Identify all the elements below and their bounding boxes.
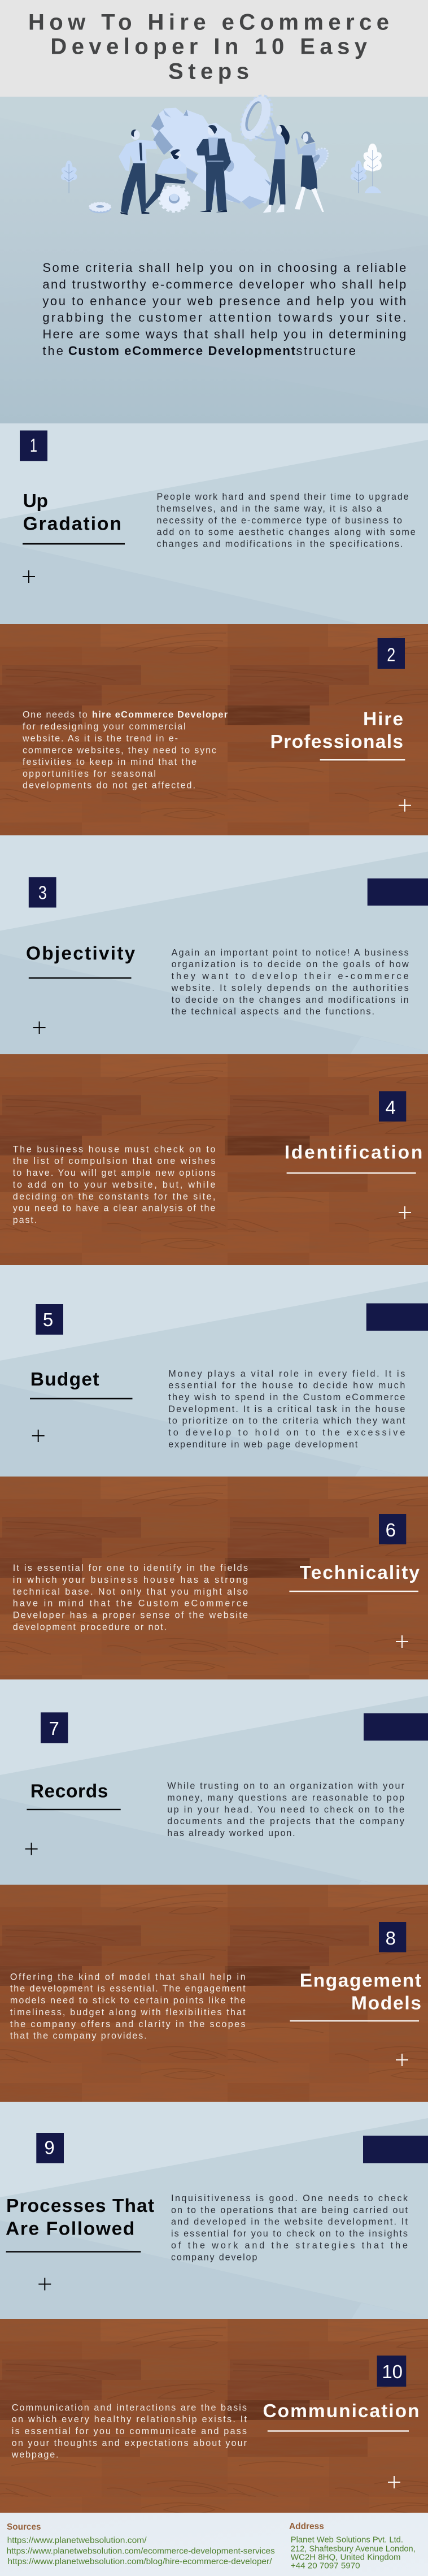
body text: on which every healthy relationship exists. It [12,2414,247,2425]
icon: right plant [351,161,366,193]
body text: of the work and the strategies that the [171,2240,408,2250]
body text: models need to stick to certain points like the [10,1995,246,2006]
number badge 4 [379,1091,406,1122]
panel: step 1 up gradation [0,423,428,661]
number badge 5: 5 [43,1309,53,1330]
illustration: team assembling gears [61,92,382,215]
number badge 6 [379,1514,406,1544]
intro text: grabbing the customer attention towards your site. [42,310,406,324]
sources: https://www.planetwebsolution.com/ [7,2535,147,2545]
number badge 10 [377,2356,406,2387]
body text: The business house must check on to [13,1144,215,1154]
plus icon [399,799,411,812]
heading [23,491,121,535]
body text: documents and the projects that the company [167,1816,405,1826]
body text: the development is essential. The engagement [10,1984,246,1994]
icon: white tree [364,144,382,193]
address: +44 20 7097 5970 [291,2561,360,2570]
panel: step 6 technicality [0,1477,428,1709]
plus icon [399,1206,411,1219]
heading: Objectivity [26,943,136,964]
heading: Gradation [23,513,121,535]
body text: development procedure or not. [13,1622,167,1633]
plus icon [25,1843,38,1855]
plus icon [396,2054,408,2066]
body text: Communication and interactions are the basis [12,2402,247,2413]
body text: on to the operations that are being carried out [171,2205,408,2215]
number badge 7 [41,1712,68,1743]
heading: Processes That [6,2196,154,2216]
sources: Sources [7,2522,41,2532]
underline [27,1809,121,1810]
body text: money, many questions are reasonable to pop [167,1793,404,1803]
body text: has already worked upon. [167,1828,295,1838]
number badge 1: 1 [30,435,37,456]
body text: People work hard and spend their time to upgrade [157,492,409,502]
body text: in which your business house has a strong [13,1575,248,1585]
body text [22,710,228,791]
body text: Offering the kind of model that shall help in [10,1972,246,1982]
body text: is essential for you to communicate and pass [12,2426,247,2436]
body text: to prioritize on to the criteria which they want [168,1416,405,1426]
heading [300,1971,421,2014]
body text: on your thoughts and expectations about your [12,2438,247,2448]
address: Planet Web Solutions Pvt. Ltd. [291,2535,403,2544]
underline [289,1591,418,1592]
heading: Hire [363,709,403,730]
underline [268,2430,409,2432]
panel: step 7 records [0,1679,428,1917]
body text: technical base. Not only that you might also [13,1587,248,1597]
address: Address [289,2522,324,2531]
underline [287,1172,416,1174]
heading: Identification [285,1142,422,1163]
figure: crouching bearded man [145,149,187,209]
body text [168,1369,405,1449]
heading: Are Followed [6,2219,134,2240]
body text: hire eCommerce Developer [92,710,228,720]
navy bar [364,1713,428,1741]
body text [171,947,409,1017]
heading: Engagement [300,1971,421,1991]
sources: https://www.planetwebsolution.com/blog/hire-ecommerce-developer/ [8,2557,272,2566]
intro text: and trustworthy e-commerce developer who shall help [42,277,406,292]
heading: Technicality [300,1562,420,1583]
heading: Budget [30,1369,99,1390]
intro text [42,261,406,358]
intro text: Some criteria shall help you on in choosing a reliable [42,261,406,275]
panel: step 2 hire professionals [0,624,428,856]
underline [320,759,405,760]
body text: to develop to hold on to the excessive [168,1428,405,1438]
body text [13,1144,215,1225]
intro text: Here are some ways that shall help you in determining [42,327,406,341]
figure: man in suit [196,125,234,213]
icon: large gear [151,108,271,209]
icon: gear held by woman [299,145,333,176]
panel: step 5 budget [0,1265,428,1503]
body text: festivities to keep in mind that the [23,757,196,767]
intro text: Custom eCommerce Development [68,344,296,358]
title: Steps [168,59,249,84]
underline [29,977,131,979]
panel: title header [0,0,428,97]
underline [290,2020,419,2021]
title: Developer In 10 Easy [50,34,368,59]
body text: changes and modifications in the specifications. [157,539,403,549]
body text: opportunities for seasonal [23,769,156,779]
body text: It is essential for one to identify in the fields [13,1563,248,1573]
body text: to decide on the changes and modifications in [172,995,409,1005]
body text: webpage. [11,2450,58,2460]
number badge 7: 7 [49,1718,59,1739]
heading: Models [351,1993,421,2014]
underline [23,543,125,544]
body text: and developed in the website development. It [171,2217,408,2227]
heading: Communication [263,2401,419,2422]
number badge 2 [378,638,405,669]
number badge 9: 9 [44,2137,55,2158]
figure: man with tie [119,129,157,215]
body text: deciding on the constants for the site, [13,1192,215,1202]
body text: they want to develop their e-commerce [172,971,409,981]
body text [167,1781,405,1838]
figure: woman raising gear [255,117,290,213]
body text: you need to have a clear analysis of the [13,1203,215,1214]
body text: to add on to your website, but, while [13,1180,215,1190]
number badge 6: 6 [386,1519,396,1540]
sources: https://www.planetwebsolution.com/ecommerce-development-services [7,2547,275,2556]
heading: Records [30,1781,108,1802]
body text: the list of compulsion that one wishes [13,1156,215,1166]
icon: floor gear [160,187,189,211]
body text [11,2402,247,2460]
body text: While trusting on to an organization with your [167,1781,405,1791]
heading: Up [23,491,48,512]
icon: small gear on floor [89,202,111,213]
body text: the company offers and clarity in the scopes [10,2019,246,2029]
body text: website. It solely depends on the authorities [171,983,409,993]
number badge 8 [379,1922,406,1952]
address [289,2522,416,2570]
body text: developments do not get affected. [23,781,195,791]
panel: step 4 identification [0,1054,428,1287]
body text: past. [13,1215,37,1225]
body text: Development. It is a critical task in the house [168,1404,405,1414]
body text: the technical aspects and the functions. [172,1007,374,1017]
body text: company develop [171,2252,257,2262]
body text: for redesigning your commercial [23,722,186,732]
plus icon [23,570,35,583]
body text [10,1972,246,2041]
navy bar [366,1304,428,1331]
body text: have in mind that the Custom eCommerce [13,1599,248,1609]
body text: website. As it is the trend in e- [22,733,178,743]
body text: Developer has a proper sense of the website [13,1610,248,1621]
heading [270,709,403,752]
body text: to have. You will get ample new options [13,1168,215,1178]
panel: step 8 engagement models [0,1885,428,2117]
body text: themselves, and in the same way, it is also a [157,504,382,514]
body text: Money plays a vital role in every field. It is [168,1369,405,1379]
number badge 9 [36,2133,64,2163]
number badge 10: 10 [382,2361,403,2382]
intro text: you to enhance your web presence and help you with [42,294,406,308]
number badge 8: 8 [386,1928,396,1949]
sources [7,2522,275,2566]
panel: footer [0,2513,428,2576]
body text: Again an important point to notice! A business [172,947,409,958]
number badge 5 [36,1304,63,1335]
plus icon [388,2476,400,2488]
body text: organization is to decide on the goals of how [172,959,409,969]
underline [6,2251,141,2253]
title [28,10,389,84]
body text: is essential for you to check on to the insights [171,2229,408,2239]
body text: that the company provides. [10,2031,147,2041]
title: How To Hire eCommerce [28,10,389,35]
body text: add on to some aesthetic changes along with some [157,527,416,538]
body text: commerce websites, they need to sync [23,745,216,755]
panel: step 10 communication [0,2319,428,2551]
body text: timeliness, budget along with flexibilities that [10,2007,246,2017]
heading [6,2196,154,2240]
body text: necessity of the e-commerce type of business to [157,516,402,526]
body text [157,492,416,549]
number badge 1 [20,431,47,461]
number badge 3: 3 [38,882,47,903]
body text: Inquisitiveness is good. One needs to check [171,2193,408,2203]
panel: hero introduction [0,92,428,424]
body text: expenditure in web page development [168,1439,358,1449]
icon: lifted ring gear [235,92,277,144]
number badge 2: 2 [387,644,395,665]
intro text: the [42,344,63,358]
plus icon [396,1635,408,1648]
body text [13,1563,248,1633]
body text: up in your head. You need to check on to the [167,1804,404,1815]
panel: step 3 objectivity [0,835,428,1073]
body text: they wish to spend in the Custom eCommerce [168,1392,405,1402]
body text: One needs to [23,710,88,720]
figure: woman carrying gear [295,131,324,212]
address: WC2H 8HQ, United Kingdom [291,2552,401,2562]
body text: essential for the house to decide how much [168,1380,405,1391]
intro text: structure [296,344,356,358]
number badge 3 [29,877,56,908]
heading: Professionals [270,731,403,752]
underline [30,1398,132,1399]
address: 212, Shaftesbury Avenue London, [291,2544,416,2553]
plus icon [33,1021,46,1034]
panel: step 9 processes that are followed [0,2102,428,2339]
number badge 4: 4 [386,1097,396,1118]
plus icon [32,1430,45,1442]
icon: left plant [61,161,77,193]
navy bar [368,878,428,906]
body text [171,2193,408,2262]
navy bar [363,2136,428,2163]
plus icon [38,2278,51,2291]
